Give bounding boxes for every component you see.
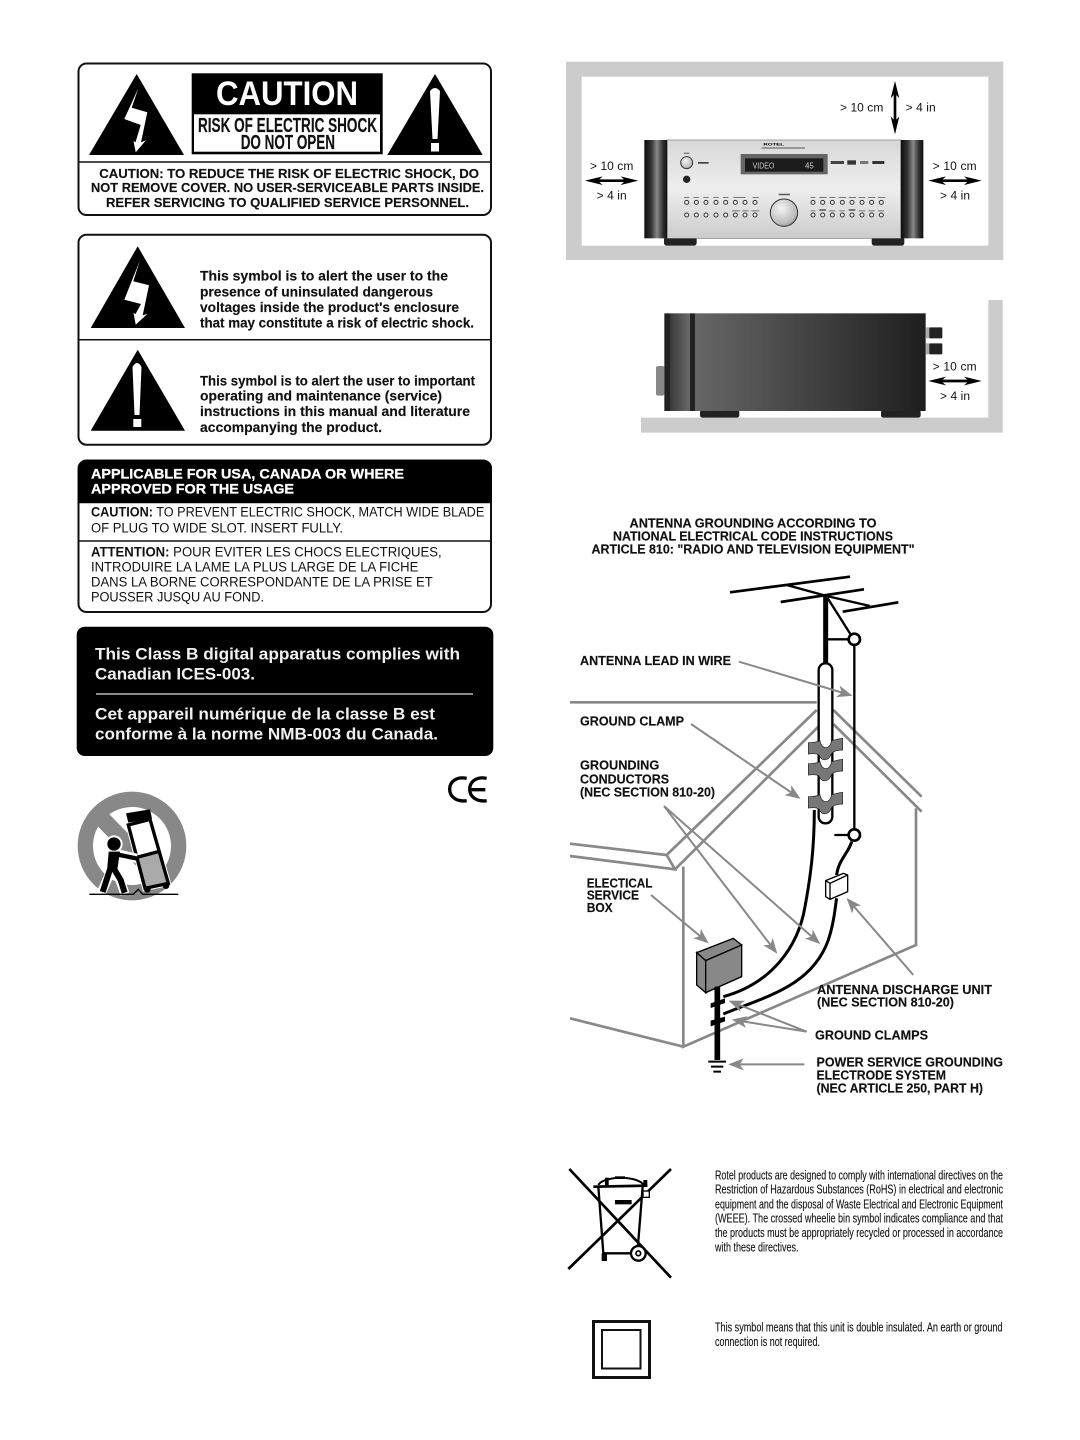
panel: Canadian compliance notice: This Class B digital apparatus complies with [95, 644, 460, 663]
text: RoHS WEEE compliance [714, 1167, 1003, 1255]
text: maintenance explanation [200, 372, 475, 435]
amplifier front view: 45 [805, 161, 814, 170]
ground clamps on sleeve [808, 738, 843, 814]
antenna grounding title [592, 516, 914, 556]
diagram labels: POWER SERVICE GROUNDING [816, 1056, 1003, 1070]
rear clearance labels [933, 359, 977, 403]
icon: lightning triangle [91, 246, 185, 328]
diagram labels: SERVICE [587, 888, 639, 902]
diagram labels: GROUND CLAMPS [815, 1028, 928, 1042]
diagram labels: GROUND CLAMP [580, 715, 684, 729]
text: english plug caution [91, 505, 484, 535]
caution instructions [91, 167, 484, 210]
arrow: top clearance [891, 81, 899, 134]
caution instructions: REFER SERVICING TO QUALIFIED SERVICE PERSONNEL. [106, 196, 469, 210]
text: RoHS WEEE compliance: with these directives. [714, 1240, 798, 1255]
text: english plug caution: OF PLUG TO WIDE SLOT. INSERT FULLY. [91, 520, 343, 535]
text: english plug caution: CAUTION: TO PREVENT ELECTRIC SHOCK, MATCH WIDE BLADE [91, 505, 484, 520]
panel: Canadian compliance notice: Canadian ICES-003. [95, 664, 255, 683]
text: maintenance explanation: This symbol is to alert the user to important [200, 372, 475, 388]
pointer arrows [651, 662, 913, 1064]
amplifier front view [644, 140, 923, 246]
clearance labels: > 10 cm [840, 101, 883, 115]
antenna grounding title: ARTICLE 810: "RADIO AND TELEVISION EQUIPMENT" [592, 542, 914, 556]
panel: Canadian compliance notice [77, 627, 493, 756]
house outline [570, 702, 922, 1047]
caution instructions: CAUTION: TO REDUCE THE RISK OF ELECTRIC SHOCK, DO [99, 167, 479, 181]
antenna discharge unit [826, 873, 848, 899]
text: double insulation note [715, 1320, 1002, 1349]
amplifier side view [656, 313, 942, 418]
arrow: left clearance [585, 176, 638, 185]
panel: front clearance diagram [566, 62, 1003, 260]
text: maintenance explanation: accompanying the product. [200, 419, 382, 435]
diagram labels: CONDUCTORS [580, 772, 669, 786]
diagram labels: ELECTRODE SYSTEM [816, 1068, 946, 1082]
text: dangerous voltage explanation [200, 268, 474, 330]
arrow: right clearance [928, 176, 982, 185]
caution instructions: NOT REMOVE COVER. NO USER-SERVICEABLE PARTS INSIDE. [91, 181, 484, 195]
lead in wire sleeve [819, 663, 832, 823]
text: maintenance explanation: operating and maintenance (service) [200, 388, 442, 404]
caution sign: RISK OF ELECTRIC SHOCK [198, 115, 377, 137]
caution sign: CAUTION [216, 75, 358, 113]
amplifier front view: ROTEL [763, 142, 785, 147]
icon: lightning warning triangle [89, 74, 184, 155]
caution sign [192, 73, 383, 154]
text: dangerous voltage explanation: presence of uninsulated dangerous [200, 283, 433, 299]
rear clearance labels: > 10 cm [933, 359, 977, 373]
clearance labels: > 4 in [597, 189, 627, 203]
panel: Canadian compliance notice: conforme à la norme NMB-003 du Canada. [95, 724, 438, 743]
diagram labels: ANTENNA LEAD IN WIRE [580, 654, 731, 668]
antenna grounding diagram [570, 577, 922, 1072]
antenna mast [730, 577, 898, 841]
diagram labels: ELECTICAL [587, 876, 653, 890]
text: double insulation note: connection is not required. [715, 1334, 820, 1349]
ground electrode [708, 987, 726, 1072]
clearance labels: > 10 cm [590, 159, 633, 173]
diagram labels: (NEC SECTION 810-20) [817, 996, 954, 1010]
arrow: rear clearance [928, 377, 982, 385]
icon: double insulated square [594, 1322, 650, 1378]
clearance labels: > 4 in [906, 101, 936, 115]
text: dangerous voltage explanation: This symbol is to alert the user to the [200, 268, 448, 284]
panel: Canadian compliance notice: Cet appareil numérique de la classe B est [95, 704, 435, 723]
icon: exclamation triangle [91, 350, 185, 431]
icon: no cart tip-over symbol [85, 799, 179, 894]
text: maintenance explanation: instructions in this manual and literature [200, 403, 470, 419]
header: applicable regions: APPROVED FOR THE USAGE [91, 480, 294, 496]
text: dangerous voltage explanation: voltages inside the product's enclosure [200, 299, 459, 315]
grounding conductors [723, 810, 852, 1014]
diagram labels: ANTENNA DISCHARGE UNIT [817, 983, 992, 997]
header: applicable regions: APPLICABLE FOR USA, CANADA OR WHERE [91, 465, 404, 481]
header: applicable regions [91, 465, 404, 496]
icon: CE mark [450, 778, 487, 801]
text: dangerous voltage explanation: that may constitute a risk of electric shock. [200, 314, 474, 330]
panel: caution risk of electric shock [78, 64, 491, 215]
rear clearance labels: > 4 in [940, 389, 970, 403]
diagram labels: GROUNDING [580, 758, 659, 772]
panel: rear clearance side view [641, 300, 1003, 433]
icon: exclamation warning triangle [387, 74, 483, 155]
antenna grounding title: ANTENNA GROUNDING ACCORDING TO [630, 516, 876, 530]
clearance labels [590, 101, 977, 203]
diagram labels [580, 654, 1003, 1095]
panel: plug caution [78, 460, 492, 612]
icon: crossed wheelie bin [568, 1169, 671, 1278]
clearance labels: > 4 in [940, 189, 970, 203]
text: french plug caution: POUSSER JUSQU AU FOND. [91, 590, 264, 605]
text: french plug caution: ATTENTION: POUR EVITER LES CHOCS ELECTRIQUES, [91, 545, 442, 560]
text: french plug caution: INTRODUIRE LA LAME LA PLUS LARGE DE LA FICHE [91, 560, 418, 575]
electrical service box [697, 938, 742, 993]
caution sign: DO NOT OPEN [241, 132, 335, 154]
panel: symbol explanations [78, 235, 491, 445]
diagram labels: (NEC SECTION 810-20) [580, 786, 715, 800]
clearance labels: > 10 cm [933, 159, 977, 173]
antenna grounding title: NATIONAL ELECTRICAL CODE INSTRUCTIONS [613, 528, 893, 544]
diagram labels: (NEC ARTICLE 250, PART H) [816, 1081, 983, 1095]
diagram labels: BOX [587, 901, 613, 915]
text: french plug caution: DANS LA BORNE CORRESPONDANTE DE LA PRISE ET [91, 575, 433, 590]
text: french plug caution [91, 545, 442, 605]
amplifier front view: VIDEO [753, 161, 774, 170]
